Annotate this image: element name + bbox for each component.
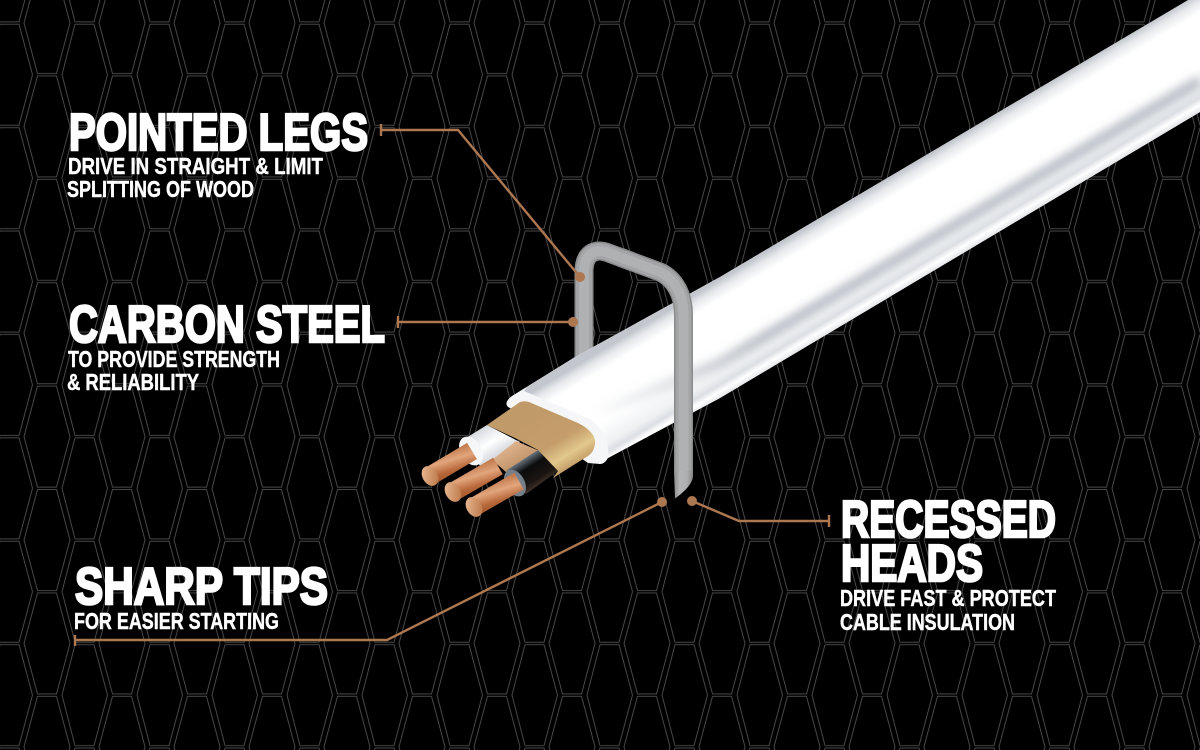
copper wire 3 with black insulation bbox=[462, 450, 558, 520]
text block: carbon steel: TO PROVIDE STRENGTH bbox=[68, 346, 280, 372]
text block: pointed legs: DRIVE IN STRAIGHT & LIMIT bbox=[68, 153, 323, 179]
staple back leg bbox=[584, 251, 632, 372]
leader: pointed legs bbox=[381, 124, 585, 282]
copper wire 1 with white insulation bbox=[418, 425, 520, 489]
text block: sharp tips: FOR EASIER STARTING bbox=[74, 608, 279, 634]
text block: pointed legs: POINTED LEGS bbox=[69, 104, 368, 162]
text block: recessed heads: CABLE INSULATION bbox=[840, 609, 1015, 635]
kraft paper wrap bbox=[487, 401, 595, 478]
text block: sharp tips: SHARP TIPS bbox=[75, 558, 328, 616]
text block: pointed legs: SPLITTING OF WOOD bbox=[67, 176, 254, 202]
text block: carbon steel bbox=[67, 296, 385, 395]
text block: sharp tips bbox=[74, 558, 328, 634]
text block: recessed heads: HEADS bbox=[841, 535, 983, 593]
jacket surface bbox=[524, 0, 1200, 458]
staple tip bbox=[674, 471, 693, 498]
staple front leg bbox=[620, 257, 693, 498]
leader: carbon steel bbox=[398, 316, 578, 328]
text block: recessed heads bbox=[840, 491, 1056, 635]
text block: recessed heads: DRIVE FAST & PROTECT bbox=[840, 585, 1056, 611]
leader: recessed heads bbox=[687, 496, 829, 527]
text block: recessed heads: RECESSED bbox=[841, 491, 1056, 549]
jacket shading band bbox=[600, 81, 1200, 412]
leader: sharp tips bbox=[75, 497, 667, 646]
text block: pointed legs bbox=[67, 104, 368, 202]
text block: carbon steel: CARBON STEEL bbox=[69, 296, 385, 354]
text block: carbon steel: & RELIABILITY bbox=[67, 369, 199, 395]
copper wire 2 with tan insulation bbox=[441, 441, 542, 505]
jacket silhouette and end rim bbox=[506, 0, 1200, 464]
cable illustration bbox=[418, 0, 1200, 520]
